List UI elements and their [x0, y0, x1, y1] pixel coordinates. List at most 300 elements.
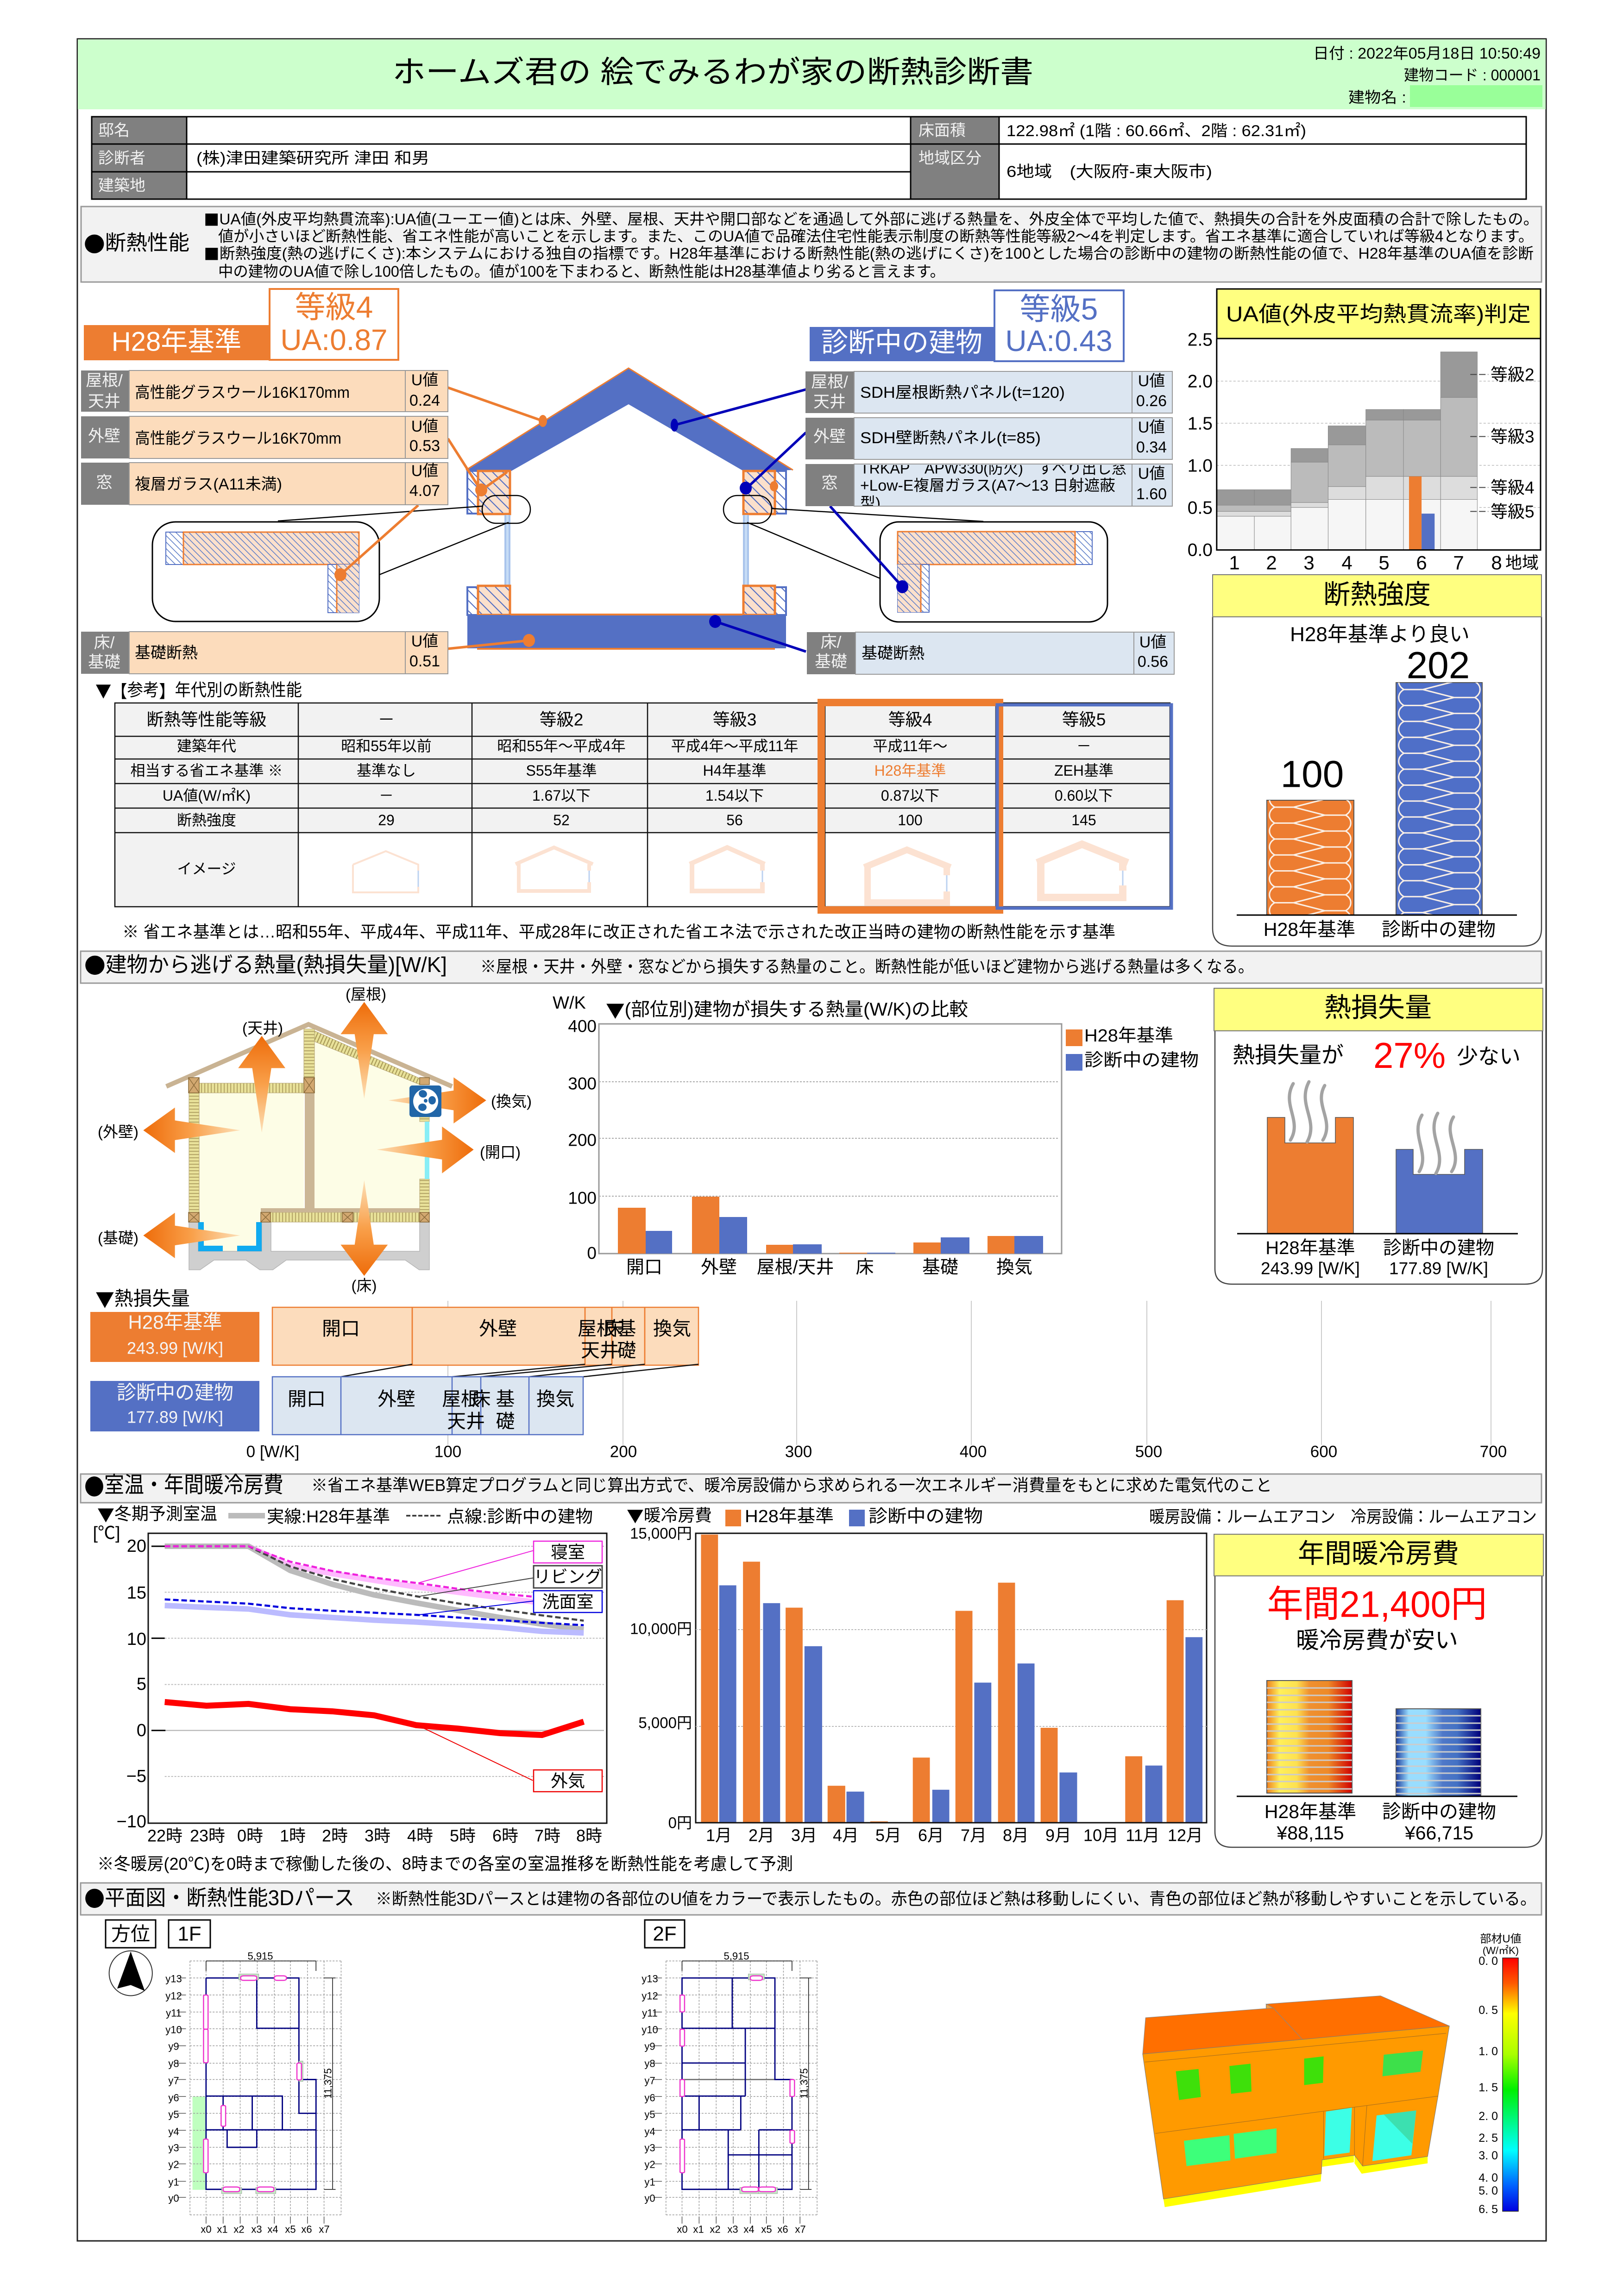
reference table: － [378, 710, 395, 729]
panel: annual heating and cooling cost: H28年基準 [1264, 1801, 1356, 1822]
heat escape labels: (基礎) [98, 1229, 138, 1247]
date and building code [1313, 44, 1541, 106]
U-value colour legend: 6. 5 [1478, 2203, 1498, 2216]
heat loss panel title: 熱損失量 [1324, 993, 1432, 1023]
strength title [1213, 575, 1541, 617]
bar chart: monthly heating and cooling cost: 5,000円 [638, 1714, 692, 1731]
icon: ventilation fan [409, 1085, 441, 1117]
H28 stack label: 243.99 [W/K] [127, 1338, 223, 1358]
reference table: 平成11年～ [873, 738, 948, 754]
floor plan 1F: y7 [168, 2075, 179, 2087]
spec rows: subject building: 基礎断熱 [862, 645, 925, 662]
axis labels: 0 [W/K] [246, 1443, 299, 1461]
bar chart: monthly heating and cooling cost: 0円 [668, 1814, 692, 1831]
panel: insulation strength [1213, 575, 1541, 946]
panel: heat loss comparison: 243.99 [W/K] [1261, 1259, 1360, 1278]
bar chart: monthly heating and cooling cost: 4月 [833, 1826, 859, 1845]
bar chart: heat loss by part: 換気 [996, 1258, 1032, 1277]
heading: reference by era: ▼【参考】年代別の断熱性能 [95, 678, 302, 703]
floor label 1F: 1F [177, 1923, 201, 1945]
bar chart: heat loss by part: 300 [568, 1074, 597, 1093]
H28 stacked bar: 礎 [617, 1340, 636, 1361]
UA axis labels: 3 [1303, 552, 1315, 573]
connector lines [341, 1364, 698, 1377]
panel: insulation strength: 診断中の建物 [1382, 919, 1496, 940]
chart legend: 診断中の建物 [1084, 1051, 1199, 1070]
floor plan 2F: y2 [644, 2159, 655, 2170]
floor plan 1F: y4 [168, 2126, 179, 2138]
spec rows: subject building: +Low-E複層ガラス(A7～13 日射遮蔽 [860, 477, 1115, 494]
subject building badge: UA:0.43 [1005, 324, 1113, 358]
building name field [1410, 85, 1542, 107]
section band: heat loss: ※屋根・天井・外壁・窓などから損失する熱量のこと。断熱性能が低いほど建物から逃げる熱量は多くなる。 [480, 957, 1254, 976]
room labels: 洗面室 [542, 1592, 594, 1612]
roof [166, 1024, 452, 1086]
line chart: winter room temperature [93, 1501, 607, 1845]
bar chart: heat loss by part: 開口 [626, 1258, 662, 1277]
floor plan 2F: y13 [642, 1973, 658, 1985]
floor plan 1F: 5,915 [247, 1951, 273, 1962]
line chart: winter room temperature: 2時 [322, 1826, 348, 1845]
house cross-section diagram [278, 368, 983, 649]
axis labels: 100 [434, 1443, 461, 1461]
building info table: 床面積 [918, 122, 966, 139]
H28 stacked bar: 屋根 [578, 1318, 616, 1339]
reference table: イメージ [177, 860, 236, 877]
floor plan 1F: x2 [233, 2224, 245, 2235]
cost panel title: 年間暖冷房費 [1298, 1538, 1459, 1569]
heat escape labels: (外壁) [98, 1123, 138, 1140]
spec rows: H28 standard: 床/ [94, 634, 115, 652]
explanation text: ■断熱強度(熱の逃げにくさ):本システムにおける独自の指標です。H28年基準における断熱性能(熱の逃げにくさ)を100とした場合の診断中の建物の断熱性能の値で、H28年基準のUA値を診断 [204, 242, 1534, 264]
line chart: winter room temperature: 10 [127, 1630, 146, 1649]
cost legend: ▼暖冷房費 [627, 1503, 712, 1527]
H28 stack label: H28年基準 [128, 1311, 222, 1333]
H28 stacked bar: 基 [617, 1318, 636, 1339]
line chart: winter room temperature: 3時 [365, 1826, 390, 1845]
spec rows: subject building: 0.26 [1136, 392, 1167, 410]
room labels: 外気 [551, 1772, 585, 1790]
floor plan 2F: x5 [761, 2224, 772, 2235]
panel: annual heating and cooling cost: 診断中の建物 [1382, 1801, 1496, 1822]
grade labels: 等級2 [1491, 365, 1535, 384]
floor plan 1F: x5 [285, 2224, 296, 2235]
subject insulation bar [1396, 683, 1482, 915]
UA axis labels: 2 [1266, 552, 1277, 573]
reference table: 0.60以下 [1055, 787, 1113, 804]
line chart: winter room temperature: 7時 [535, 1826, 560, 1845]
reference table: 断熱強度 [177, 812, 236, 828]
header band [78, 39, 1546, 109]
H28 insulation bar [1267, 800, 1354, 915]
axis labels: 500 [1135, 1443, 1162, 1461]
reference table: 等級3 [713, 710, 756, 729]
spec rows: H28 standard [81, 370, 448, 674]
UA stepped bar chart [1217, 339, 1541, 550]
UA axis labels: 1.0 [1188, 456, 1213, 476]
reference table: 建築年代 [177, 738, 236, 754]
axis labels: 700 [1480, 1443, 1507, 1461]
axis labels [246, 1443, 1507, 1461]
spec rows: H28 standard: 0.24 [409, 392, 440, 409]
bar chart: heat loss by part: 床 [856, 1258, 874, 1277]
bar chart: heat loss by part: 100 [568, 1188, 597, 1208]
line chart: winter room temperature: 8時 [576, 1826, 602, 1845]
U-value colour legend: 5. 0 [1478, 2184, 1498, 2197]
spec rows: subject building: 屋根/ [811, 373, 848, 391]
heat escape labels: (屋根) [346, 985, 386, 1003]
floor plan 2F: 11,375 [799, 2068, 810, 2099]
3D thermal building model [1143, 1996, 1449, 2207]
floor plan 2F: y11 [642, 2007, 658, 2019]
heat loss panel title [1214, 988, 1543, 1031]
UA axis labels: 0.0 [1188, 540, 1213, 560]
heat escape labels: (換気) [491, 1093, 532, 1110]
bar chart: monthly heating and cooling cost: 10,000円 [630, 1620, 692, 1637]
spec rows: H28 standard: 天井 [88, 393, 120, 410]
floor plan 2F: y0 [644, 2192, 655, 2204]
axis labels: 200 [610, 1443, 637, 1461]
H28 stacked bar: 天井 [581, 1340, 619, 1361]
cost legend: 診断中の建物 [868, 1507, 983, 1526]
floor plan 1F [165, 1951, 341, 2235]
floor plan 2F: x0 [677, 2224, 688, 2235]
bar chart: heat loss by part: 外壁 [701, 1258, 737, 1277]
floor plan 2F: x7 [795, 2224, 806, 2235]
spec rows: subject building: U値 [1139, 634, 1166, 651]
spec rows: subject building: TRKAP APW330(防火) すべり出し窓 [860, 459, 1126, 477]
detail callout right [880, 522, 1107, 622]
reference table: ZEH基準 [1054, 762, 1113, 779]
spec rows: subject building: 天井 [813, 393, 846, 411]
floor plan 2F: x4 [743, 2224, 755, 2235]
bar chart: monthly heating and cooling cost: 7月 [961, 1826, 987, 1845]
cost legend [627, 1503, 983, 1527]
U-value colour legend: 部材U値 [1480, 1933, 1522, 1945]
U-value colour legend: (W/㎡K) [1483, 1945, 1519, 1956]
explanation text: 値が小さいほど断熱性能、省エネ性能が高いことを示します。また、このUA値で品確法住宅性能表示制度の断熱等性能等級2～4を判定します。省エネ基準に適合していれば等級4となります。 [218, 228, 1534, 245]
room interiors [199, 1041, 425, 1251]
floor plan 1F: x4 [267, 2224, 278, 2235]
reference table: 1.67以下 [532, 787, 591, 804]
spec rows: H28 standard: 外壁 [88, 427, 120, 445]
chart legend [1066, 1026, 1199, 1071]
title: ホームズ君の 絵でみるわが家の断熱診断書 [392, 55, 1033, 89]
temperature legend [97, 1501, 593, 1526]
footnote: energy standard: ※ 省エネ基準とは…昭和55年、平成4年、平成11年、平成28年に改正された省エネ法で示された改正当時の建物の断熱性能を示す基準 [122, 922, 1115, 941]
line chart: winter room temperature: −10 [117, 1812, 146, 1832]
equipment note: 暖房設備：ルームエアコン 冷房設備：ルームエアコン [1149, 1507, 1537, 1526]
section band: floor plan and 3D: ●平面図・断熱性能3Dパース [84, 1882, 354, 1913]
floor plan 1F: y0 [168, 2192, 179, 2204]
UA axis labels: 7 [1453, 552, 1464, 573]
floor plan 1F: y6 [168, 2092, 179, 2103]
building info table: 地域区分 [918, 150, 981, 167]
subject stacked bar: 換気 [536, 1388, 574, 1410]
floor plan 1F: y9 [168, 2040, 179, 2052]
subject stack label [90, 1381, 259, 1431]
timbers [189, 1078, 429, 1222]
subject building badge: 診断中の建物 [821, 328, 982, 358]
spec rows: subject building: 0.56 [1138, 653, 1168, 671]
temperature legend: 実線:H28年基準 [267, 1507, 390, 1526]
bar chart: monthly heating and cooling cost: 6月 [918, 1826, 944, 1845]
U-value colour legend: 1. 0 [1478, 2045, 1498, 2058]
section band: floor plan and 3D: ※断熱性能3Dパースとは建物の各部位のU値をカラーで表示したもの。赤色の部位ほど熱は移動しにくい、青色の部位ほど熱が移動しやすいことを示している。 [376, 1889, 1536, 1908]
floor plan 2F: y12 [642, 1990, 658, 2001]
line chart: winter room temperature: 22時 [147, 1826, 182, 1845]
UA axis labels: 0.5 [1188, 498, 1213, 518]
floor plan 1F: x3 [251, 2224, 262, 2235]
reference table: 等級2 [540, 710, 583, 729]
panel: annual heating and cooling cost: ¥66,715 [1404, 1822, 1473, 1844]
line chart: winter room temperature: [℃] [93, 1524, 120, 1543]
floor plan 1F: y12 [165, 1990, 182, 2001]
foundation [189, 1222, 429, 1270]
floor plan 2F: y7 [644, 2075, 655, 2087]
spec rows: subject building: 外壁 [813, 428, 846, 445]
panel: annual heating and cooling cost: ¥88,115 [1276, 1822, 1344, 1844]
panel: heat loss comparison: 診断中の建物 [1383, 1238, 1494, 1258]
bar chart: monthly heating and cooling cost: 2月 [749, 1826, 774, 1845]
UA axis labels: 8 [1491, 552, 1502, 573]
grade labels [1491, 365, 1535, 521]
subject stacked bar: 開口 [288, 1388, 326, 1410]
H28 standard badge: H28年基準 [112, 327, 241, 357]
heat escape labels: (天井) [242, 1020, 283, 1036]
bar chart: heat loss by part: 基礎 [922, 1258, 958, 1277]
bar chart: heat loss by part: W/K [553, 993, 586, 1013]
H28 standard badge: 等級4 [295, 290, 373, 324]
cost legend: H28年基準 [745, 1507, 834, 1526]
subject building badge [810, 290, 1124, 361]
spec rows: subject building: U値 [1138, 465, 1165, 483]
line chart: winter room temperature: −5 [126, 1767, 146, 1786]
bar chart: heat loss by part: 0 [587, 1244, 597, 1262]
cost bars [1237, 1681, 1517, 1796]
temperature legend: ▼冬期予測室温 [97, 1501, 217, 1526]
floor plan 1F: y13 [165, 1973, 182, 1985]
grade labels: 等級5 [1491, 502, 1535, 521]
floor plan 2F: x1 [693, 2224, 704, 2235]
UA axis labels: 5 [1378, 552, 1390, 573]
line chart: winter room temperature: 23時 [190, 1826, 225, 1845]
floor plan 2F: y3 [644, 2142, 655, 2153]
UA panel title [1217, 289, 1541, 339]
line chart: winter room temperature: 15 [127, 1583, 146, 1603]
panel: heat loss comparison: 177.89 [W/K] [1389, 1259, 1488, 1278]
building info table: 6地域 (大阪府-東大阪市) [1007, 163, 1212, 181]
floor label 1F [169, 1920, 210, 1948]
line chart: winter room temperature: 5時 [450, 1826, 476, 1845]
floor plan 2F [642, 1951, 817, 2235]
line chart: winter room temperature: 0時 [237, 1826, 263, 1845]
bar chart: monthly heating and cooling cost: 1月 [706, 1826, 732, 1845]
floor plan 2F: y9 [644, 2040, 655, 2052]
bar chart: heat loss by part: ▼(部位別)建物が損失する熱量(W/K)の比較 [606, 996, 968, 1023]
spec rows: subject building [805, 371, 1174, 674]
UA axis labels: 6 [1416, 552, 1427, 573]
floor plan 1F: 11,375 [322, 2068, 333, 2099]
section band: room temperature and cost [81, 1469, 1541, 1503]
panel: insulation strength: H28年基準より良い [1290, 623, 1470, 646]
bar chart: monthly heating and cooling cost: 8月 [1003, 1826, 1029, 1845]
floor plan 1F: y3 [168, 2142, 179, 2153]
floor plan 1F: y11 [166, 2007, 182, 2019]
reference table: 0.87以下 [881, 787, 939, 804]
panel: heat loss comparison: 熱損失量が [1233, 1043, 1344, 1068]
H28 standard badge [84, 289, 398, 360]
UA axis labels [1188, 330, 1539, 573]
floor plan 2F: 5,915 [723, 1951, 749, 1962]
building info table [92, 116, 1526, 200]
subject stack label: 177.89 [W/K] [127, 1408, 223, 1426]
floor plan 1F: x6 [301, 2224, 312, 2235]
wall and ceiling insulation [189, 1029, 429, 1222]
leader lines [334, 388, 908, 652]
reference table: 断熱等性能等級 [146, 710, 267, 729]
heat loss bars [1237, 1082, 1518, 1234]
subject stacked bar: 屋根 [442, 1388, 480, 1410]
spec rows: H28 standard: 屋根/ [86, 371, 123, 390]
spec rows: H28 standard: 0.51 [409, 652, 440, 670]
U-value colour legend: 2. 0 [1478, 2110, 1498, 2123]
H28 stacked bar [272, 1307, 698, 1365]
orientation label [106, 1920, 156, 1948]
spec rows: H28 standard: 複層ガラス(A11未満) [135, 476, 282, 493]
window glass [425, 1122, 429, 1179]
U-value colour legend [1478, 1933, 1522, 2216]
reference table: 平成4年～平成11年 [671, 738, 799, 754]
floor label 2F [645, 1920, 685, 1948]
reference table: 29 [378, 812, 395, 828]
bar chart: monthly heating and cooling cost: 5月 [875, 1826, 901, 1845]
axis labels: 600 [1310, 1443, 1337, 1461]
spec rows: H28 standard: 0.53 [409, 437, 440, 455]
section band: room temperature and cost: ※省エネ基準WEB算定プログラムと同じ算出方式で、暖冷房設備から求められる一次エネルギー消費量をもとに求めた電気代のこと [311, 1475, 1272, 1495]
spec rows: H28 standard: 高性能グラスウール16K70mm [135, 430, 341, 447]
panel: annual heating and cooling cost [1214, 1534, 1543, 1847]
spec rows: H28 standard: U値 [411, 418, 438, 435]
panel: insulation strength: 202 [1407, 645, 1470, 686]
bar chart: heat loss by part: 400 [568, 1017, 597, 1035]
stacked heat loss chart [90, 1285, 1507, 1461]
U-value colour legend: 1. 5 [1478, 2081, 1498, 2094]
floor plan 2F: y6 [644, 2092, 655, 2103]
building info table: 診断者 [98, 150, 145, 167]
spec rows: H28 standard: 高性能グラスウール16K170mm [135, 384, 350, 401]
heading: insulation performance: ●断熱性能 [84, 228, 189, 257]
spec rows: H28 standard: U値 [411, 371, 438, 389]
axis labels: 400 [960, 1443, 987, 1461]
spec rows: subject building: 0.34 [1136, 439, 1167, 456]
UA axis labels: 2.0 [1188, 371, 1213, 392]
spec rows: subject building: U値 [1138, 419, 1165, 436]
subject stacked bar: 外壁 [377, 1388, 415, 1410]
reference table: 145 [1071, 812, 1096, 828]
reference table: UA値(W/㎡K) [163, 787, 251, 804]
UA panel title: UA値(外皮平均熱貫流率)判定 [1226, 302, 1531, 326]
H28 stacked bar: 外壁 [479, 1318, 517, 1339]
heat escape labels [98, 985, 532, 1294]
H28 stacked bar: 換気 [653, 1318, 691, 1339]
grade 5 highlight [997, 705, 1171, 908]
panel: insulation performance explanation [81, 207, 1541, 282]
building info table: (株)津田建築研究所 津田 和男 [196, 150, 429, 167]
strength title: 断熱強度 [1323, 580, 1431, 609]
U-value colour legend: 2. 5 [1478, 2132, 1498, 2145]
panel: insulation strength: 100 [1281, 753, 1344, 796]
panel: annual heating and cooling cost: 年間21,400円 [1267, 1584, 1487, 1625]
line chart: winter room temperature: 20 [127, 1537, 146, 1556]
cost panel title [1214, 1534, 1543, 1576]
heat escape labels: (床) [352, 1277, 377, 1294]
explanation text: 中の建物のUA値で除し100倍したもの。値が100を下まわると、断熱性能はH28基準値より劣ると言えます。 [218, 263, 945, 280]
date and building code: 建物コード : 000001 [1404, 67, 1541, 83]
U-value colour legend: 0. 5 [1478, 2004, 1498, 2017]
panel: UA value chart [1188, 289, 1541, 573]
floor plan 2F: y10 [642, 2024, 658, 2036]
U-value colour legend: 3. 0 [1478, 2149, 1498, 2162]
panel: insulation strength: H28年基準 [1264, 919, 1355, 940]
floor plan 1F: x0 [201, 2224, 212, 2235]
panel: heat loss comparison: 少ない [1457, 1044, 1521, 1068]
building info table: 邸名 [98, 122, 130, 139]
temperature legend: 点線:診断中の建物 [447, 1507, 593, 1526]
spec rows: H28 standard: 基礎 [88, 653, 120, 671]
icon: compass [109, 1951, 152, 1996]
heat escape labels: (開口) [480, 1144, 521, 1161]
date and building code: 建物名 : [1348, 89, 1406, 106]
line chart: winter room temperature: 4時 [407, 1826, 433, 1845]
reference table: 昭和55年～平成4年 [497, 738, 626, 754]
partition and floor timber [261, 1093, 420, 1212]
panel: heat loss comparison: 27% [1373, 1035, 1446, 1076]
bar chart: monthly heating and cooling cost: 3月 [791, 1826, 817, 1845]
section band: floor plan and 3D [81, 1882, 1541, 1915]
spec rows: subject building: 床/ [821, 634, 842, 651]
floor plan 1F: x1 [217, 2224, 228, 2235]
bar chart: monthly heating and cooling cost: 12月 [1168, 1826, 1203, 1845]
spec rows: H28 standard: U値 [411, 462, 438, 480]
section band: heat loss: ●建物から逃げる熱量(熱損失量)[W/K] [84, 949, 447, 980]
spec rows: H28 standard: U値 [411, 633, 438, 650]
grade labels: 等級4 [1491, 478, 1535, 497]
subject stacked bar [272, 1377, 583, 1435]
floor plan 2F: x2 [710, 2224, 721, 2235]
house thumbnails [353, 844, 1128, 903]
floor plan 2F: x3 [727, 2224, 738, 2235]
floor plan 1F: y8 [168, 2058, 179, 2069]
bar chart: monthly heating and cooling cost: 11月 [1126, 1826, 1160, 1845]
H28 stack label [90, 1311, 259, 1362]
UA axis labels: 地域 [1505, 553, 1539, 572]
subject stack label: 診断中の建物 [117, 1382, 233, 1403]
reference table: H4年基準 [703, 762, 766, 779]
spec rows: subject building: 1.60 [1136, 485, 1167, 503]
explanation text [204, 208, 1539, 280]
building heat escape diagram [143, 1002, 486, 1276]
room labels [534, 1541, 602, 1792]
spec rows: subject building: U値 [1138, 372, 1165, 390]
chart legend: H28年基準 [1084, 1026, 1173, 1046]
bar chart: monthly heating and cooling cost: 10月 [1083, 1826, 1119, 1845]
bar chart: monthly heating and cooling cost: 15,000円 [630, 1524, 692, 1542]
line chart: winter room temperature: 5 [137, 1675, 146, 1694]
reference table: 100 [898, 812, 923, 828]
floor plan 2F: y4 [644, 2126, 655, 2138]
explanation text: ■UA値(外皮平均熱貫流率):UA値(ユーエー値)とは床、外壁、屋根、天井や開口部などを通過して外部に逃げる熱量を、外皮全体で平均した値で、熱損失の合計を外皮面積の合計で除したもの。 [204, 208, 1539, 230]
